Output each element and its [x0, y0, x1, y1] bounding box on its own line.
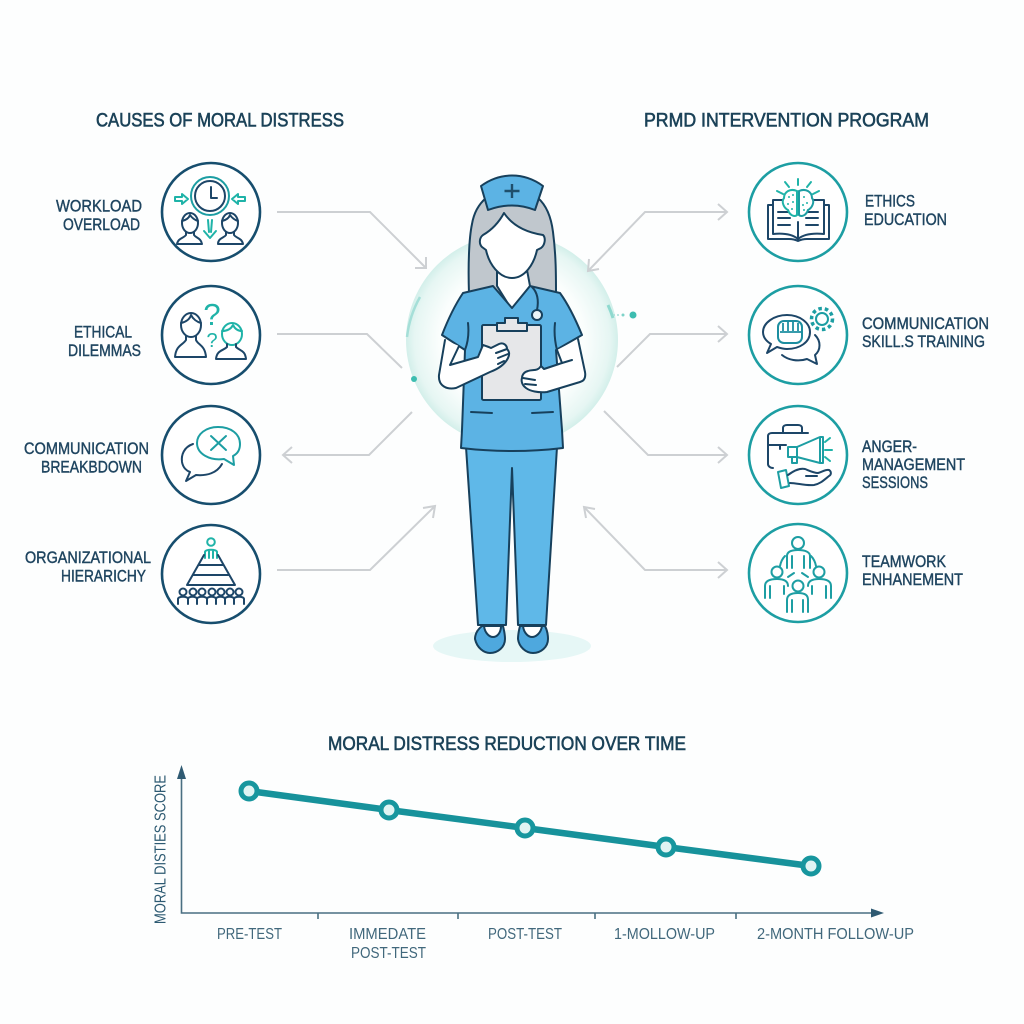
label: EDUCATION	[864, 211, 947, 229]
program: teamwork enhancement	[749, 524, 963, 622]
icon: two people with question marks: ?	[206, 330, 218, 352]
label: ETHICS	[865, 192, 915, 210]
program: communication skills training	[749, 286, 989, 384]
shoes	[475, 626, 548, 653]
neck	[497, 270, 530, 310]
halo accent dots	[407, 297, 636, 382]
label: TEAMWORK	[862, 553, 946, 571]
left arm and hand on chest	[439, 340, 509, 388]
scrub details	[465, 323, 557, 413]
label	[56, 198, 142, 234]
axes	[177, 765, 884, 919]
program: anger management sessions	[749, 406, 965, 504]
x axis labels	[217, 926, 914, 962]
arrow: communication breakdown	[283, 412, 412, 463]
arrow: communication skills training	[617, 326, 727, 367]
label: ENHANEMENT	[862, 571, 963, 589]
label	[864, 192, 947, 229]
label	[25, 549, 151, 586]
heading: PRMD intervention program: PRMD INTERVENTION PROGRAM	[644, 110, 929, 132]
x axis labels: 2-MONTH FOLLOW-UP	[757, 926, 914, 943]
arrow: anger management sessions	[604, 411, 727, 463]
label: HIERARICHY	[61, 568, 146, 586]
arrow: teamwork enhancement	[584, 507, 727, 578]
central halo	[406, 234, 618, 446]
label: SKILL.S TRAINING	[862, 333, 985, 351]
label: COMMUNICATION	[862, 315, 989, 333]
cause: organizational hierarchy	[25, 525, 260, 623]
label	[68, 324, 141, 360]
label: DILEMMAS	[68, 342, 141, 360]
nurse figure	[439, 176, 585, 653]
icon: briefcase, megaphone and hand	[749, 406, 847, 504]
icon: fist in speech bubble with gear	[749, 286, 847, 384]
label: OVERLOAD	[63, 216, 140, 234]
label: ANGER-	[862, 438, 917, 456]
icon: clock and people	[162, 163, 260, 261]
x axis labels: POST-TEST	[488, 926, 562, 943]
cause: communication breakdown	[24, 406, 260, 504]
stethoscope	[532, 287, 542, 320]
nurse cap	[481, 176, 543, 210]
x axis labels: 1-MOLLOW-UP	[614, 926, 715, 943]
floor shadow	[433, 630, 591, 662]
label: COMMUNICATION	[24, 440, 149, 458]
x axis labels: IMMEDATE	[349, 926, 426, 943]
label	[24, 440, 149, 476]
scrub top	[442, 286, 582, 451]
label: BREAKBDOWN	[41, 458, 142, 476]
y axis label: MORAL DISTIES SCORE	[152, 775, 170, 924]
face	[480, 213, 545, 278]
cause: ethical dilemmas	[68, 286, 260, 384]
data line	[249, 791, 811, 866]
arrow: ethical dilemmas to nurse	[277, 334, 402, 368]
data markers	[241, 783, 819, 874]
right arm and hand holding clipboard	[522, 339, 585, 392]
icon: two people with question marks: ?	[203, 297, 221, 332]
label: SESSIONS	[862, 474, 928, 492]
label: ETHICAL	[74, 324, 132, 342]
label	[862, 315, 989, 351]
arrow: ethics education	[588, 204, 727, 271]
icon: team of people	[749, 524, 847, 622]
icon: book and brain	[749, 163, 847, 261]
program: ethics education	[749, 163, 947, 261]
label: MANAGEMENT	[862, 456, 965, 474]
icon: two people with question marks	[162, 286, 260, 384]
hair	[469, 198, 556, 294]
clipboard	[482, 318, 541, 400]
heading: causes of moral distress: CAUSES OF MORAL DISTRESS	[96, 110, 344, 132]
label	[862, 438, 965, 492]
line chart	[152, 765, 914, 962]
cause: workload overload	[56, 163, 260, 261]
icon: crossed speech bubbles	[162, 406, 260, 504]
arrow: organizational hierarchy to nurse	[277, 506, 435, 570]
pants	[466, 447, 557, 625]
label: ORGANIZATIONAL	[25, 549, 151, 567]
x axis labels: POST-TEST	[351, 945, 426, 962]
x axis labels: PRE-TEST	[217, 926, 282, 943]
arrow: workload overload to nurse	[277, 212, 426, 268]
heading: moral distress reduction over time: MORAL DISTRESS REDUCTION OVER TIME	[328, 734, 686, 755]
label: WORKLOAD	[56, 198, 142, 216]
label	[862, 553, 963, 589]
icon: pyramid with crowd	[162, 525, 260, 623]
